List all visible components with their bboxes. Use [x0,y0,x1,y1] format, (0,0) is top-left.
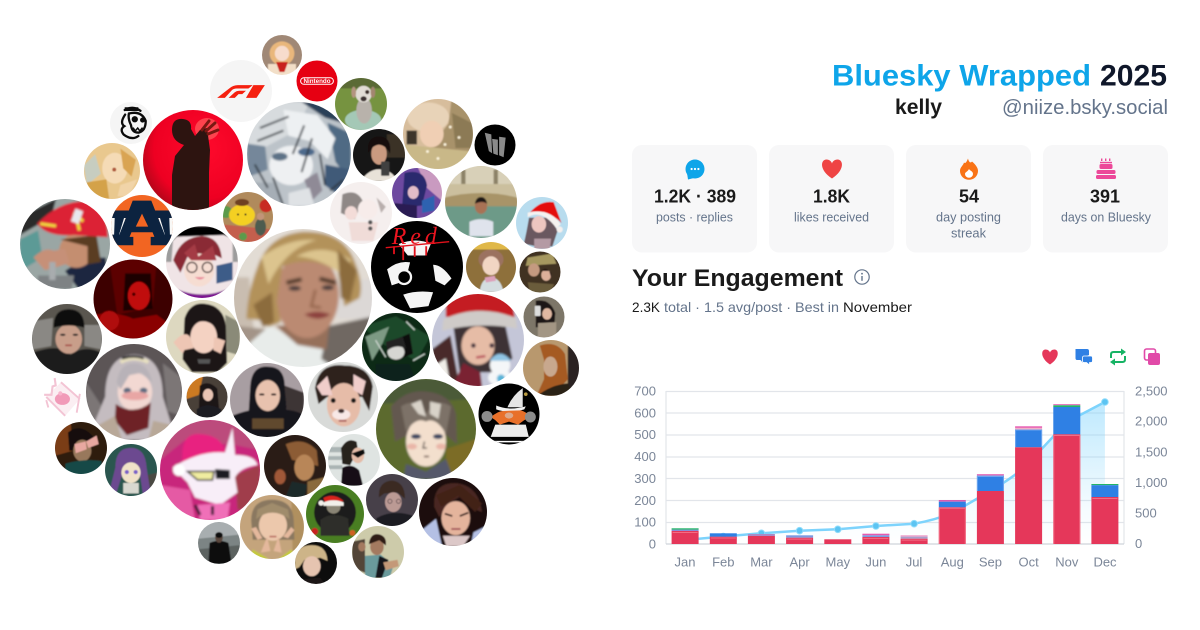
right axis labels: 1,000 [1135,475,1168,490]
cumulative area [685,402,1105,544]
avatar: brown haired anime girl [466,242,516,292]
avatar: glasses man dark [363,471,421,529]
avatar: Red black and white art: Red [391,224,438,250]
icon: flame [960,158,978,180]
grid lines [666,391,1124,544]
handle: @niize.bsky.social [1002,97,1168,119]
display name: kelly [895,96,942,119]
avatar: yellow bear with lights [223,192,273,242]
avatar: dark animated man [264,435,326,497]
panel: days on Bluesky [1043,145,1168,252]
left axis labels: 400 [634,449,656,464]
avatar: purple hair anime [105,444,157,496]
stat label: days on Bluesky [1061,210,1152,224]
engagement summary: total · 1.5 avg/post · Best in [664,299,839,315]
month labels [675,554,1117,570]
bar: Aug [939,500,966,544]
icon: heart [822,160,842,178]
month labels: Feb [712,554,735,570]
stat label: posts · replies [656,210,733,224]
avatar: small dark girl [186,376,228,418]
bar: Sep [977,474,1004,544]
stat value: 391 [1090,186,1120,206]
avatar: W logo [474,124,516,166]
avatar: grey anime manga [247,102,351,206]
engagement summary [632,299,912,315]
avatar: girl mirror selfie [524,296,564,338]
avatar: couple [520,252,560,292]
bar: Jan [672,528,699,544]
stacked bars [672,404,1118,544]
stat label: streak [951,226,987,240]
right axis labels: 2,500 [1135,384,1168,398]
avatar: Nintendo logo: Nintendo [303,78,331,85]
cumulative points [720,399,1108,540]
avatar: white dog on grass [335,78,387,130]
avatar: F1 logo [210,60,272,122]
icon: quotes [1144,349,1160,365]
avatar: F1 driver red cap [20,199,110,289]
avatar: black hair girl hands [166,300,240,374]
month labels: Jun [865,554,886,570]
right axis labels: 1,500 [1135,444,1168,460]
avatar: grey hair anime scarf [86,344,182,440]
avatar: boy with phone [353,129,405,181]
bar: Apr [786,535,813,544]
avatar: purple blue girl [392,168,442,218]
panel: likes received [769,145,894,252]
right axis labels [1135,384,1168,551]
avatar: skull scribble [110,102,152,144]
left axis labels: 600 [634,406,656,420]
avatar: Nintendo logo [296,60,338,102]
avatar: blonde girl [262,35,302,75]
icon: likes [1042,350,1058,364]
bar: Jul [901,535,928,544]
avatar: santa hat girl [516,197,568,249]
bar: Jun [862,534,889,544]
combo chart: monthly engagement [634,384,1168,570]
avatar: dog filter boy [308,362,378,432]
engagement summary: November [843,299,912,315]
avatar: black beanie [32,304,102,374]
avatar: man at Trevi fountain [445,166,517,238]
avatar: Red black and white art [371,221,463,313]
month labels: Oct [1018,554,1039,570]
stat label [936,210,1001,240]
avatar: green anime boy [376,379,476,479]
avatar: big blond man turtleneck [234,229,372,367]
avatar: dark hair novelty glasses [55,422,107,474]
avatar: blond boy [293,540,339,586]
avatar: dark red girl [94,260,172,338]
avatar: orange pale illustration [84,143,140,199]
bar: Mar [748,534,775,544]
avatar: guy pointing [349,523,407,581]
title: 2025 [1100,60,1167,92]
stat label: likes received [794,210,869,224]
avatar: red silhouette [143,110,243,210]
bar: Nov [1053,404,1080,544]
avatar: Auburn logo [111,195,173,257]
icon: replies [1076,349,1092,365]
chart legend [1042,348,1160,366]
left axis labels: 100 [634,514,656,530]
avatar: ginger long hair [523,340,579,396]
right axis labels: 500 [1135,506,1157,520]
avatar: pale snowman illustration [330,182,392,244]
left axis labels: 700 [634,384,656,398]
stat value: 1.8K [813,186,850,206]
month labels: Jul [906,554,922,570]
avatar cluster [15,33,582,586]
month labels: May [826,554,851,570]
stat value: 1.2K · 389 [654,186,736,206]
right axis labels: 0 [1135,536,1142,551]
avatar: Christmas wreath [303,482,367,546]
panel: posts and replies [632,145,757,252]
icon: reposts [1110,348,1126,366]
heading: Your Engagement: Your Engagement [632,265,843,292]
avatar: dark haired game man [416,475,490,549]
icon: cake [1096,158,1116,179]
avatar: santa hat game girl [432,294,524,386]
avatar: wizard [478,384,540,444]
left axis labels: 0 [649,536,656,552]
month labels: Sep [979,554,1002,570]
avatar: pink demon Christmas [160,420,260,520]
bar: Feb [710,533,737,544]
title: Bluesky Wrapped [832,60,1091,92]
month labels: Jan [675,554,695,570]
avatar: blonde kpop hands [240,495,304,559]
bar: May [824,539,851,544]
avatar: red hair glasses anime [166,226,238,298]
avatar: Jennie black tee [230,363,304,437]
panel: day posting streak [906,145,1031,252]
left axis labels: 300 [634,471,656,486]
left axis labels: 200 [634,493,656,508]
left axis labels: 500 [634,427,656,442]
engagement summary: 2.3K [632,299,661,315]
stat label: day posting [936,210,1001,224]
left axis labels [634,384,656,552]
bar: Dec [1091,484,1118,544]
avatar: woman fur hat lights [403,99,473,169]
cumulative line [685,402,1105,540]
avatar: small dark coat [198,522,240,564]
avatar: sunglasses profile [328,434,380,486]
month labels: Nov [1055,554,1079,570]
avatar: green hat anime [362,313,430,381]
month labels: Apr [789,554,810,570]
avatar: pink crib [44,378,80,416]
month labels: Aug [941,554,964,570]
month labels: Mar [750,554,773,570]
right axis labels: 2,000 [1135,414,1168,428]
month labels: Dec [1093,554,1117,570]
icon: chat bubble [686,160,704,180]
stat value: 54 [959,186,979,206]
icon: info [855,270,869,284]
bar: Oct [1015,426,1042,544]
